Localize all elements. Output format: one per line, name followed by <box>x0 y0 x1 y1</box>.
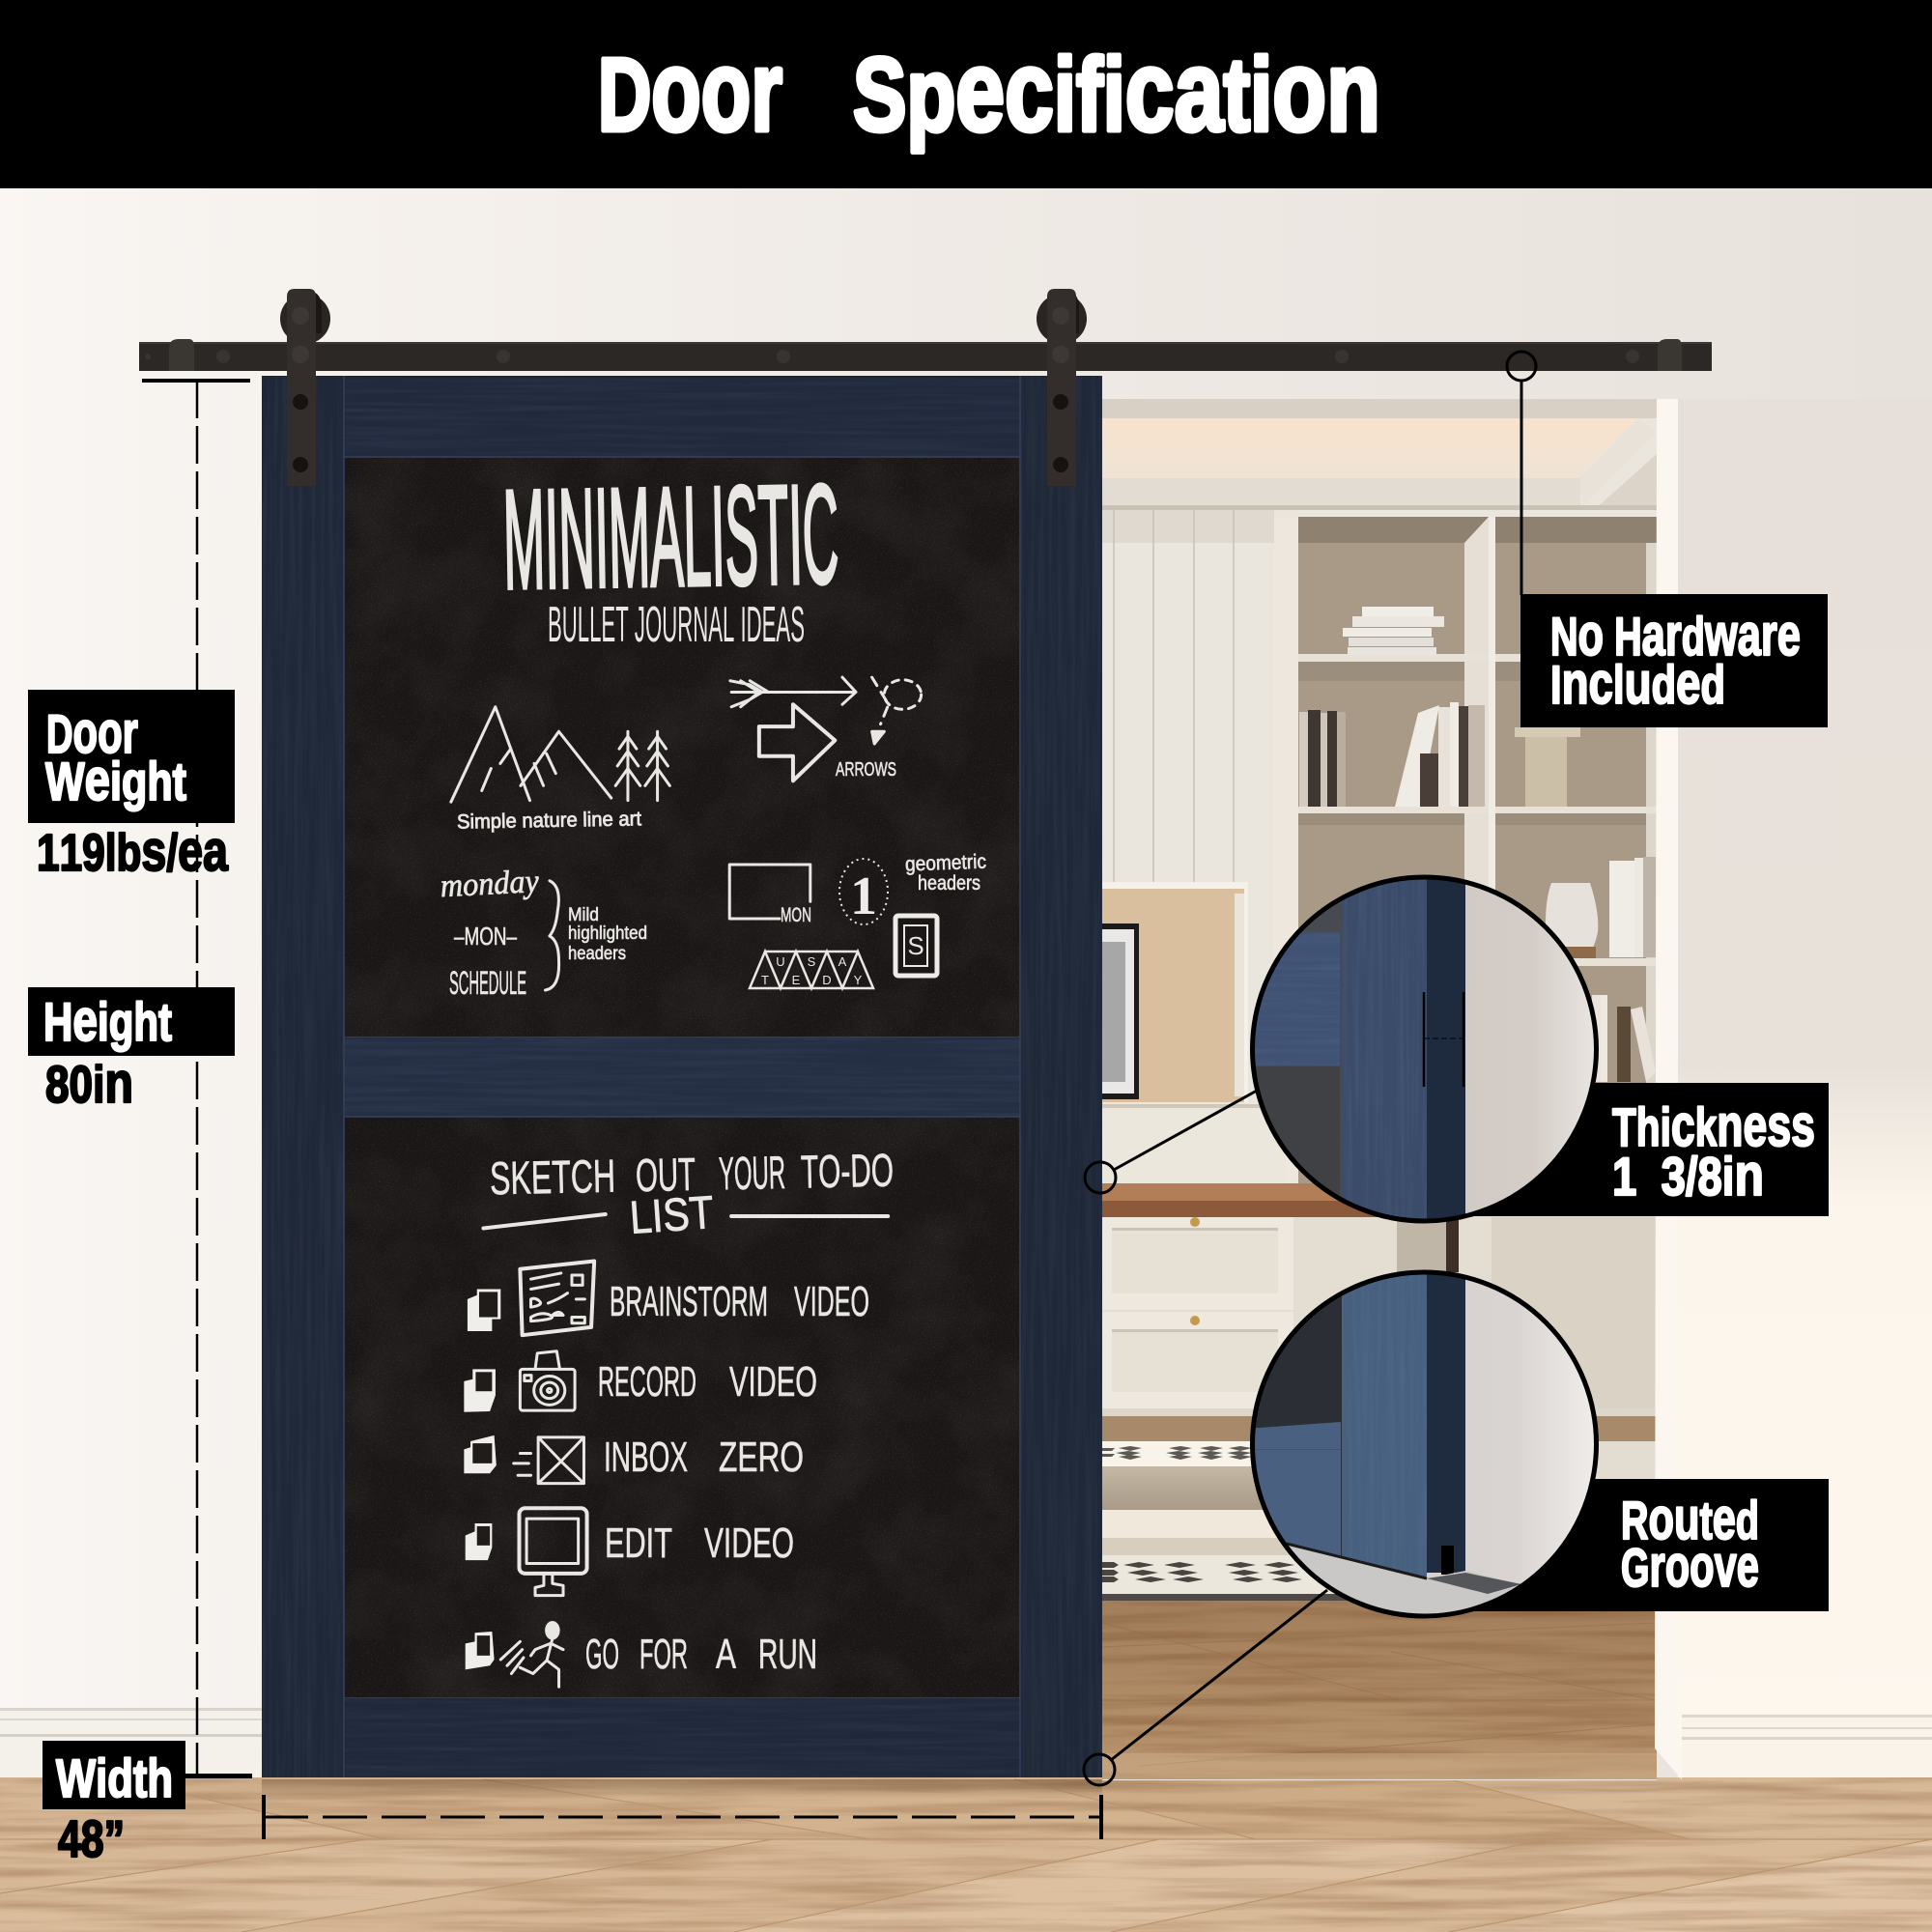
chalk caption: arrows: ARROWS <box>836 759 896 781</box>
chalk banner: tuesday <box>750 952 873 988</box>
chalk banner: tuesday: U <box>776 954 785 969</box>
chalk item: inbox zero: ZERO <box>719 1434 804 1481</box>
chalk banner: tuesday: D <box>822 973 832 987</box>
door middle rail <box>344 1037 1020 1117</box>
icon: brainstorm board <box>520 1261 594 1335</box>
books on the shelves <box>1299 607 1656 1082</box>
label: no hardware included: Included <box>1550 650 1725 717</box>
width dimension line <box>264 1795 1101 1839</box>
label: door weight: Door <box>46 699 138 766</box>
chalk banner: tuesday: E <box>792 973 801 987</box>
chalk item: brainstorm video: BRAINSTORM <box>610 1278 768 1325</box>
icon: camera <box>520 1351 575 1410</box>
chalk heading: sketch out your to-do: SKETCH <box>490 1151 616 1205</box>
right door hanger <box>1037 289 1087 486</box>
chalk drawing: lower panel <box>464 1146 895 1687</box>
chalk item: go for a run: RUN <box>758 1631 817 1678</box>
icon: monitor <box>519 1508 587 1596</box>
chalk item: record video: RECORD <box>598 1358 696 1406</box>
chalk item: go for a run: FOR <box>639 1631 688 1678</box>
title: Specification <box>853 27 1380 156</box>
chalk text: mild highlighted headers: headers <box>568 944 626 964</box>
chalk heading: sketch out your to-do: OUT <box>635 1150 696 1202</box>
lower chalkboard panel <box>345 1118 1019 1697</box>
interior floor and rug <box>1102 1408 1657 1779</box>
chalk text: mild highlighted headers <box>568 905 647 964</box>
detail circle: routed groove <box>1246 1265 1623 1623</box>
chalk banner: tuesday: T <box>761 973 769 987</box>
header band <box>0 0 1932 188</box>
door top rail <box>344 378 1020 457</box>
label: thickness: 1 3/8in <box>1612 1142 1764 1208</box>
callout pointer: no hardware <box>1507 352 1536 595</box>
chalk heading: list: LIST <box>628 1187 716 1244</box>
chalk label: mon: –MON– <box>454 922 517 951</box>
door left stile <box>262 376 344 1777</box>
door bottom rail <box>344 1697 1020 1777</box>
chalk item: record video: VIDEO <box>729 1358 817 1406</box>
chalk text: mild highlighted headers: Mild <box>568 905 599 925</box>
label: routed groove: Routed <box>1621 1486 1759 1552</box>
title <box>598 27 1380 156</box>
label: thickness: Thickness <box>1612 1093 1815 1159</box>
value: door weight: 119lbs/ea <box>37 818 229 883</box>
door jamb <box>1655 399 1682 1779</box>
label: height: Height <box>43 987 172 1054</box>
chalk item: brainstorm video: VIDEO <box>794 1278 869 1325</box>
icon: brace <box>545 881 559 990</box>
label: routed groove <box>1468 1479 1829 1611</box>
icon: checkboxes <box>464 1289 500 1669</box>
icon: dotted numeral circle: 1 <box>850 867 877 926</box>
chalk heading: sketch out your to-do: TO-DO <box>800 1146 895 1199</box>
label: routed groove: Groove <box>1621 1533 1759 1600</box>
chalk text: geometric headers: geometric <box>905 851 986 875</box>
icon: S box: S <box>907 931 924 960</box>
title: Door <box>598 27 782 156</box>
icon: runner <box>500 1622 563 1687</box>
label: no hardware included <box>1520 594 1828 727</box>
chalk heading: sketch out your to-do: YOUR <box>718 1148 786 1200</box>
icon: mountains and trees <box>451 707 669 802</box>
chalk label: monday: monday <box>440 864 541 904</box>
value: width: 48” <box>58 1810 125 1868</box>
callout pointer: routed groove <box>1084 1590 1327 1785</box>
chalk drawing: upper panel <box>440 455 986 1002</box>
callout pointer: thickness <box>1085 1091 1257 1193</box>
chalk item: edit video: VIDEO <box>704 1520 794 1567</box>
chalk item: edit video: EDIT <box>605 1520 672 1567</box>
chalk banner: tuesday: S <box>808 954 816 969</box>
chalk text: geometric headers: headers <box>918 872 980 895</box>
upper chalkboard panel <box>345 458 1019 1037</box>
door right stile <box>1020 376 1102 1777</box>
chalk text: geometric headers <box>905 851 986 895</box>
chalk item: edit video <box>605 1520 794 1567</box>
chalk item: inbox zero: INBOX <box>604 1434 688 1481</box>
icon: open frame header <box>729 865 810 919</box>
label: thickness <box>1468 1083 1829 1216</box>
value: height: 80in <box>45 1050 133 1115</box>
chalk item: go for a run: GO <box>585 1631 619 1678</box>
label: door weight: Weight <box>45 747 186 813</box>
chalk text: mild highlighted headers: highlighted <box>568 923 647 944</box>
barn door track with stoppers and bolts <box>139 339 1712 371</box>
chalk label: frame mon: MON <box>781 904 811 926</box>
detail circle: door thickness <box>1246 869 1604 1231</box>
chalk item: go for a run: A <box>716 1631 736 1678</box>
chalk banner: tuesday: Y <box>854 973 863 987</box>
framed art and photograph <box>1102 882 1248 1106</box>
icon: envelope <box>514 1437 583 1484</box>
interior room seen through the doorway <box>1102 399 1682 1780</box>
cabinet and desk <box>1102 1102 1657 1413</box>
chalk underline strokes <box>483 1214 888 1228</box>
icon: S box <box>895 916 937 976</box>
chalk banner: tuesday: A <box>838 954 847 969</box>
barn door <box>262 376 1102 1777</box>
chalk item: go for a run <box>585 1631 817 1678</box>
label: no hardware included: No Hardware <box>1550 602 1801 668</box>
chalk caption: nature line art: Simple nature line art <box>457 808 641 834</box>
height dimension line <box>142 379 252 1778</box>
chalk heading: sketch out your to-do <box>490 1146 895 1205</box>
left door hanger <box>280 289 330 486</box>
chalk drawing: upper panel: BULLET JOURNAL IDEAS <box>548 597 805 653</box>
label: width: Width <box>56 1747 173 1808</box>
chalk drawing: upper panel: MINIMALISTIC <box>502 455 839 618</box>
icon: dotted numeral circle <box>839 859 888 926</box>
chalk drawing: upper panel: SCHEDULE <box>449 965 526 1002</box>
icon: arrows <box>730 677 922 781</box>
chalk item: inbox zero <box>604 1434 804 1481</box>
label: door weight <box>28 690 235 823</box>
